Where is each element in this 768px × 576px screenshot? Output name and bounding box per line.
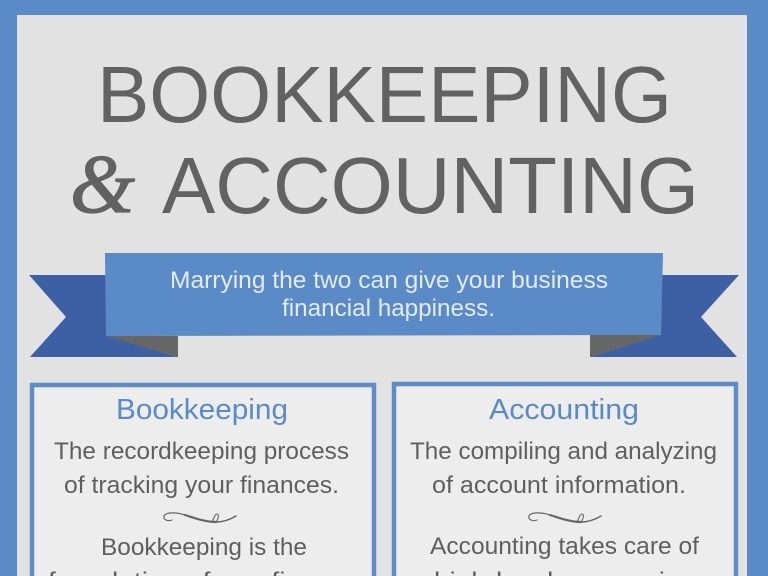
accounting heading: Accounting [489,394,639,426]
ribbon left tail [29,275,178,357]
ribbon front [105,253,663,336]
ribbon left fold [106,336,178,357]
icon: flourish divider [164,513,236,522]
bookkeeping detail: Bookkeeping is the [101,534,307,561]
title ampersand: & [70,138,136,231]
ribbon text: financial happiness. [282,295,495,322]
accounting detail: Accounting takes care of [430,533,699,560]
title line: accounting: ACCOUNTING [162,141,699,230]
accounting detail [430,533,699,576]
accounting definition: The compiling and analyzing [410,438,717,465]
panel: accounting [394,384,736,576]
bookkeeping definition: of tracking your finances. [64,472,339,499]
ribbon banner [29,253,739,357]
ribbon text: Marrying the two can give your business [170,267,608,294]
ribbon right fold [590,335,661,357]
ribbon right tail [590,275,739,357]
accounting definition: of account information. [432,472,686,499]
title [70,50,699,231]
panel: bookkeeping [32,385,374,576]
bookkeeping heading: Bookkeeping [116,394,288,426]
bookkeeping detail [48,534,362,576]
bookkeeping box [32,385,374,576]
bookkeeping definition [54,438,349,499]
accounting box [394,384,736,576]
accounting definition [410,438,717,499]
bookkeeping definition: The recordkeeping process [54,438,349,465]
ribbon text [170,267,608,322]
icon: flourish divider [529,513,601,522]
title line: bookkeeping: BOOKKEEPING [97,50,672,139]
